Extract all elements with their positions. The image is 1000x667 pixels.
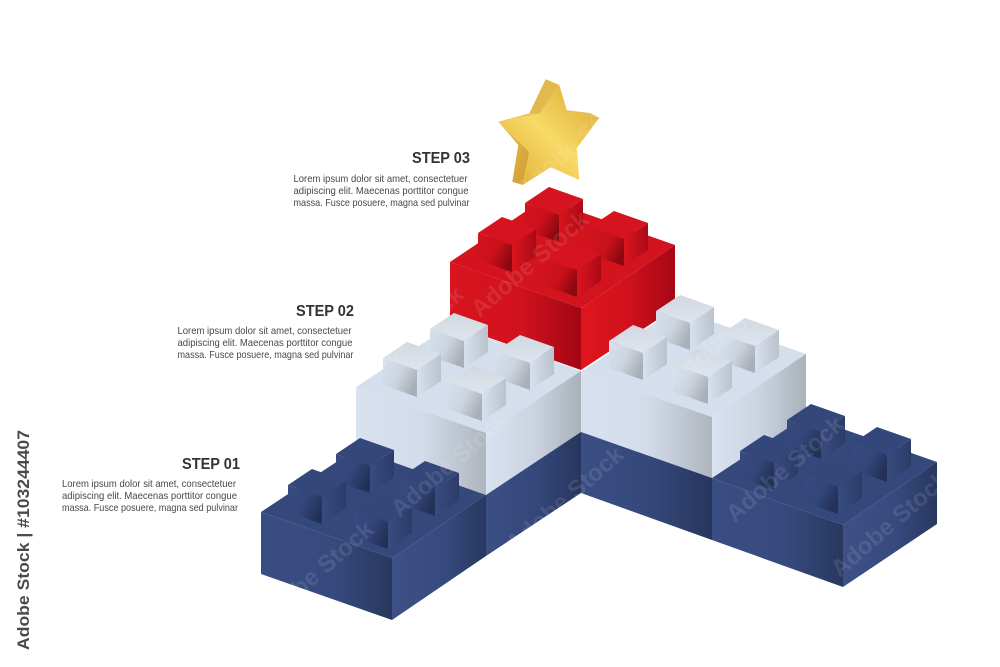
step 02 description: massa. Fusce posuere, magna sed pulvinar	[178, 349, 354, 361]
step 02 heading: STEP 02	[296, 303, 354, 320]
blue base centre-left face	[486, 432, 581, 556]
blue right brick right face	[843, 462, 937, 587]
white right brick top	[581, 309, 806, 417]
step 01 heading: STEP 01	[182, 456, 240, 473]
watermark pattern: Adobe Stock	[386, 406, 515, 523]
step 01 text block	[62, 456, 240, 514]
step 02 description	[178, 325, 354, 361]
blue stud right right	[853, 427, 911, 482]
step 03 heading: STEP 03	[412, 150, 470, 167]
step 03 description: Lorem ipsum dolor sit amet, consectetuer	[294, 173, 468, 185]
white stud front	[448, 366, 506, 421]
blue left brick right face	[392, 495, 486, 620]
watermark pattern: Adobe Stock	[663, 276, 792, 393]
red brick right face	[581, 245, 675, 370]
white stud back right	[656, 295, 714, 350]
step 03 description: massa. Fusce posuere, magna sed pulvinar	[294, 197, 470, 209]
white right brick right face	[712, 354, 806, 478]
watermark pattern	[251, 48, 955, 633]
red stud back	[525, 187, 583, 242]
white stud back	[430, 313, 488, 368]
step 02 description: adipiscing elit. Maecenas porttitor congue	[178, 337, 353, 349]
step 03 text block	[294, 150, 470, 209]
white left brick right face	[486, 371, 581, 495]
step 01 description: Lorem ipsum dolor sit amet, consectetuer	[62, 478, 236, 490]
blue stud back	[336, 438, 394, 493]
watermark pattern: Adobe Stock	[511, 86, 640, 203]
red brick left face	[450, 262, 581, 370]
blue stud left	[288, 469, 346, 524]
brick: white right step 02	[581, 295, 806, 478]
blue left brick left face	[261, 512, 392, 620]
red brick top	[450, 199, 675, 308]
step 02 description: Lorem ipsum dolor sit amet, consectetuer	[178, 325, 352, 337]
watermark pattern: Adobe Stock	[396, 48, 525, 165]
white right brick left face	[581, 372, 712, 478]
watermark pattern: Adobe Stock	[466, 206, 595, 323]
red stud right	[590, 211, 648, 266]
brick: blue right step 01	[712, 404, 937, 587]
blue stud left right	[740, 435, 798, 490]
step 02 text block	[178, 303, 354, 361]
blue stud front right	[804, 459, 862, 514]
icon: gold star	[498, 79, 599, 185]
watermark pattern: Adobe Stock	[826, 466, 955, 583]
watermark pattern: Adobe Stock	[341, 281, 470, 398]
blue stud right	[401, 461, 459, 516]
blue stud front	[354, 494, 412, 549]
vertical stock credit: Adobe Stock | #103244407	[14, 430, 33, 650]
white left brick top	[356, 325, 581, 433]
star side faces	[529, 79, 559, 114]
white stud right	[496, 335, 554, 390]
watermark pattern: Adobe Stock	[721, 411, 850, 528]
blue left brick top	[261, 449, 486, 558]
white stud front right	[674, 349, 732, 404]
watermark pattern: Adobe Stock	[501, 441, 630, 558]
red stud front	[543, 242, 601, 297]
white stud right right	[721, 318, 779, 373]
watermark pattern: Adobe Stock	[251, 516, 380, 633]
white left brick left face	[356, 387, 486, 495]
blue stud back right	[787, 404, 845, 459]
step 01 description: adipiscing elit. Maecenas porttitor congue	[62, 490, 237, 502]
blue right brick left face	[712, 478, 843, 587]
brick: blue left step 01	[261, 438, 486, 620]
brick: white left step 02	[356, 313, 581, 495]
red stud left	[478, 217, 536, 272]
brick: red step 03	[450, 187, 675, 370]
blue right brick top	[712, 416, 937, 525]
step 01 description	[62, 478, 238, 514]
blue base centre-right face	[581, 432, 712, 540]
step 03 description	[294, 173, 470, 209]
white stud left right	[609, 325, 667, 380]
step 01 description: massa. Fusce posuere, magna sed pulvinar	[62, 502, 238, 514]
step 03 description: adipiscing elit. Maecenas porttitor congue	[294, 185, 469, 197]
white stud left	[383, 342, 441, 397]
star front face	[498, 85, 599, 185]
